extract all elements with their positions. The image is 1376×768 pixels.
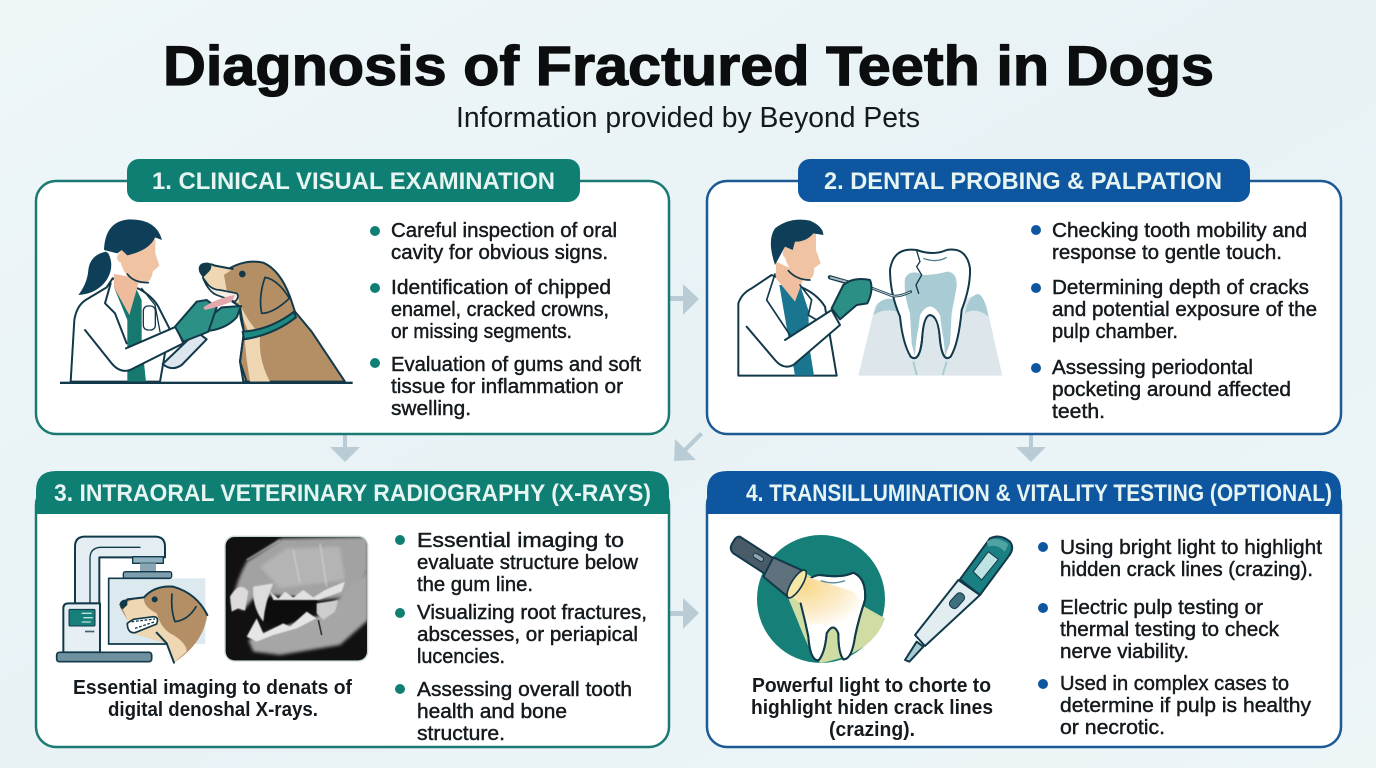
illustration: x-ray machine and dog	[57, 537, 207, 663]
bullet list: determine if pulp is healthy	[1060, 694, 1312, 717]
heading: step 3	[36, 471, 669, 514]
bullet list: enamel, cracked crowns,	[391, 298, 609, 321]
caption: (crazing).	[829, 718, 915, 741]
illustration: vet examining dog	[60, 219, 353, 384]
heading: step 4	[707, 471, 1341, 514]
bullet list: tissue for inflammation or	[391, 375, 623, 398]
heading: step 1	[127, 159, 580, 202]
bullet list: the gum line.	[417, 573, 533, 596]
bullet list: evaluate structure below	[417, 551, 638, 574]
bullet list: Checking tooth mobility and	[1052, 219, 1307, 242]
panel: transillumination and vitality testing	[707, 471, 1341, 747]
illustration: pulp tester	[905, 536, 1012, 662]
bullet list: Essential imaging to	[417, 529, 624, 552]
bullet list: Assessing overall tooth	[417, 678, 632, 701]
bullet list: cavity for obvious signs.	[391, 241, 608, 264]
bullet list: structure.	[417, 722, 505, 745]
heading: step 2: 2. DENTAL PROBING & PALPATION	[824, 168, 1222, 195]
bullet list: Identification of chipped	[391, 276, 611, 299]
bullet list: lucencies.	[417, 645, 505, 668]
subtitle: Information provided by Beyond Pets	[456, 102, 920, 134]
bullet list: or necrotic.	[1060, 716, 1165, 739]
panel: intraoral radiography	[36, 471, 669, 747]
arrow: step 1 to step 2	[670, 284, 699, 315]
bullet list: thermal testing to check	[1060, 618, 1280, 641]
bullet list: Assessing periodontal	[1052, 356, 1253, 379]
bullet list	[370, 219, 641, 420]
bullet list: nerve viability.	[1060, 640, 1189, 663]
x-ray image of dog jaw	[224, 536, 368, 662]
arrow: step 2 to step 3	[674, 432, 703, 461]
bullet list: teeth.	[1052, 400, 1105, 423]
illustration: vet probing cracked tooth	[738, 220, 1002, 376]
heading: step 2	[798, 159, 1250, 202]
bullet list: Visualizing root fractures,	[417, 601, 647, 624]
bullet list: Used in complex cases to	[1060, 672, 1289, 695]
bullet list: Careful inspection of oral	[391, 219, 617, 242]
heading: step 1: 1. CLINICAL VISUAL EXAMINATION	[152, 168, 555, 195]
bullet list: Evaluation of gums and soft	[391, 353, 641, 376]
caption	[73, 676, 352, 721]
arrow: step 2 to step 4	[1016, 435, 1046, 462]
title: Diagnosis of Fractured Teeth in Dogs	[163, 34, 1214, 97]
bullet list: abscesses, or periapical	[417, 623, 638, 646]
caption	[751, 674, 993, 741]
bullet list: hidden crack lines (crazing).	[1060, 558, 1313, 581]
bullet list: Determining depth of cracks	[1052, 276, 1309, 299]
bullet list: health and bone	[417, 700, 567, 723]
panel: clinical visual examination	[36, 159, 669, 434]
bullet list: pulp chamber.	[1052, 320, 1178, 343]
bullet list: Electric pulp testing or	[1060, 596, 1263, 619]
bullet list: response to gentle touch.	[1052, 241, 1282, 264]
caption: Powerful light to chorte to	[752, 674, 991, 697]
arrow: step 3 to step 4	[670, 598, 699, 629]
caption: digital denoshal X-rays.	[108, 698, 318, 721]
bullet list	[395, 529, 647, 745]
heading: step 3: 3. INTRAORAL VETERINARY RADIOGRAPHY (X-RAYS)	[54, 480, 651, 507]
bullet list: pocketing around affected	[1052, 378, 1291, 401]
illustration: flashlight on tooth	[731, 535, 885, 663]
bullet list	[1038, 536, 1322, 739]
bullet list: and potential exposure of the	[1052, 298, 1317, 321]
bullet list: or missing segments.	[391, 320, 572, 343]
arrow: step 1 to step 3	[330, 435, 360, 462]
bullet list: Using bright light to highlight	[1060, 536, 1322, 559]
bullet list: swelling.	[391, 397, 471, 420]
bullet list	[1031, 219, 1317, 423]
caption: Essential imaging to denats of	[73, 676, 352, 699]
caption: highlight hiden crack lines	[751, 696, 993, 719]
panel: dental probing and palpation	[707, 159, 1341, 434]
